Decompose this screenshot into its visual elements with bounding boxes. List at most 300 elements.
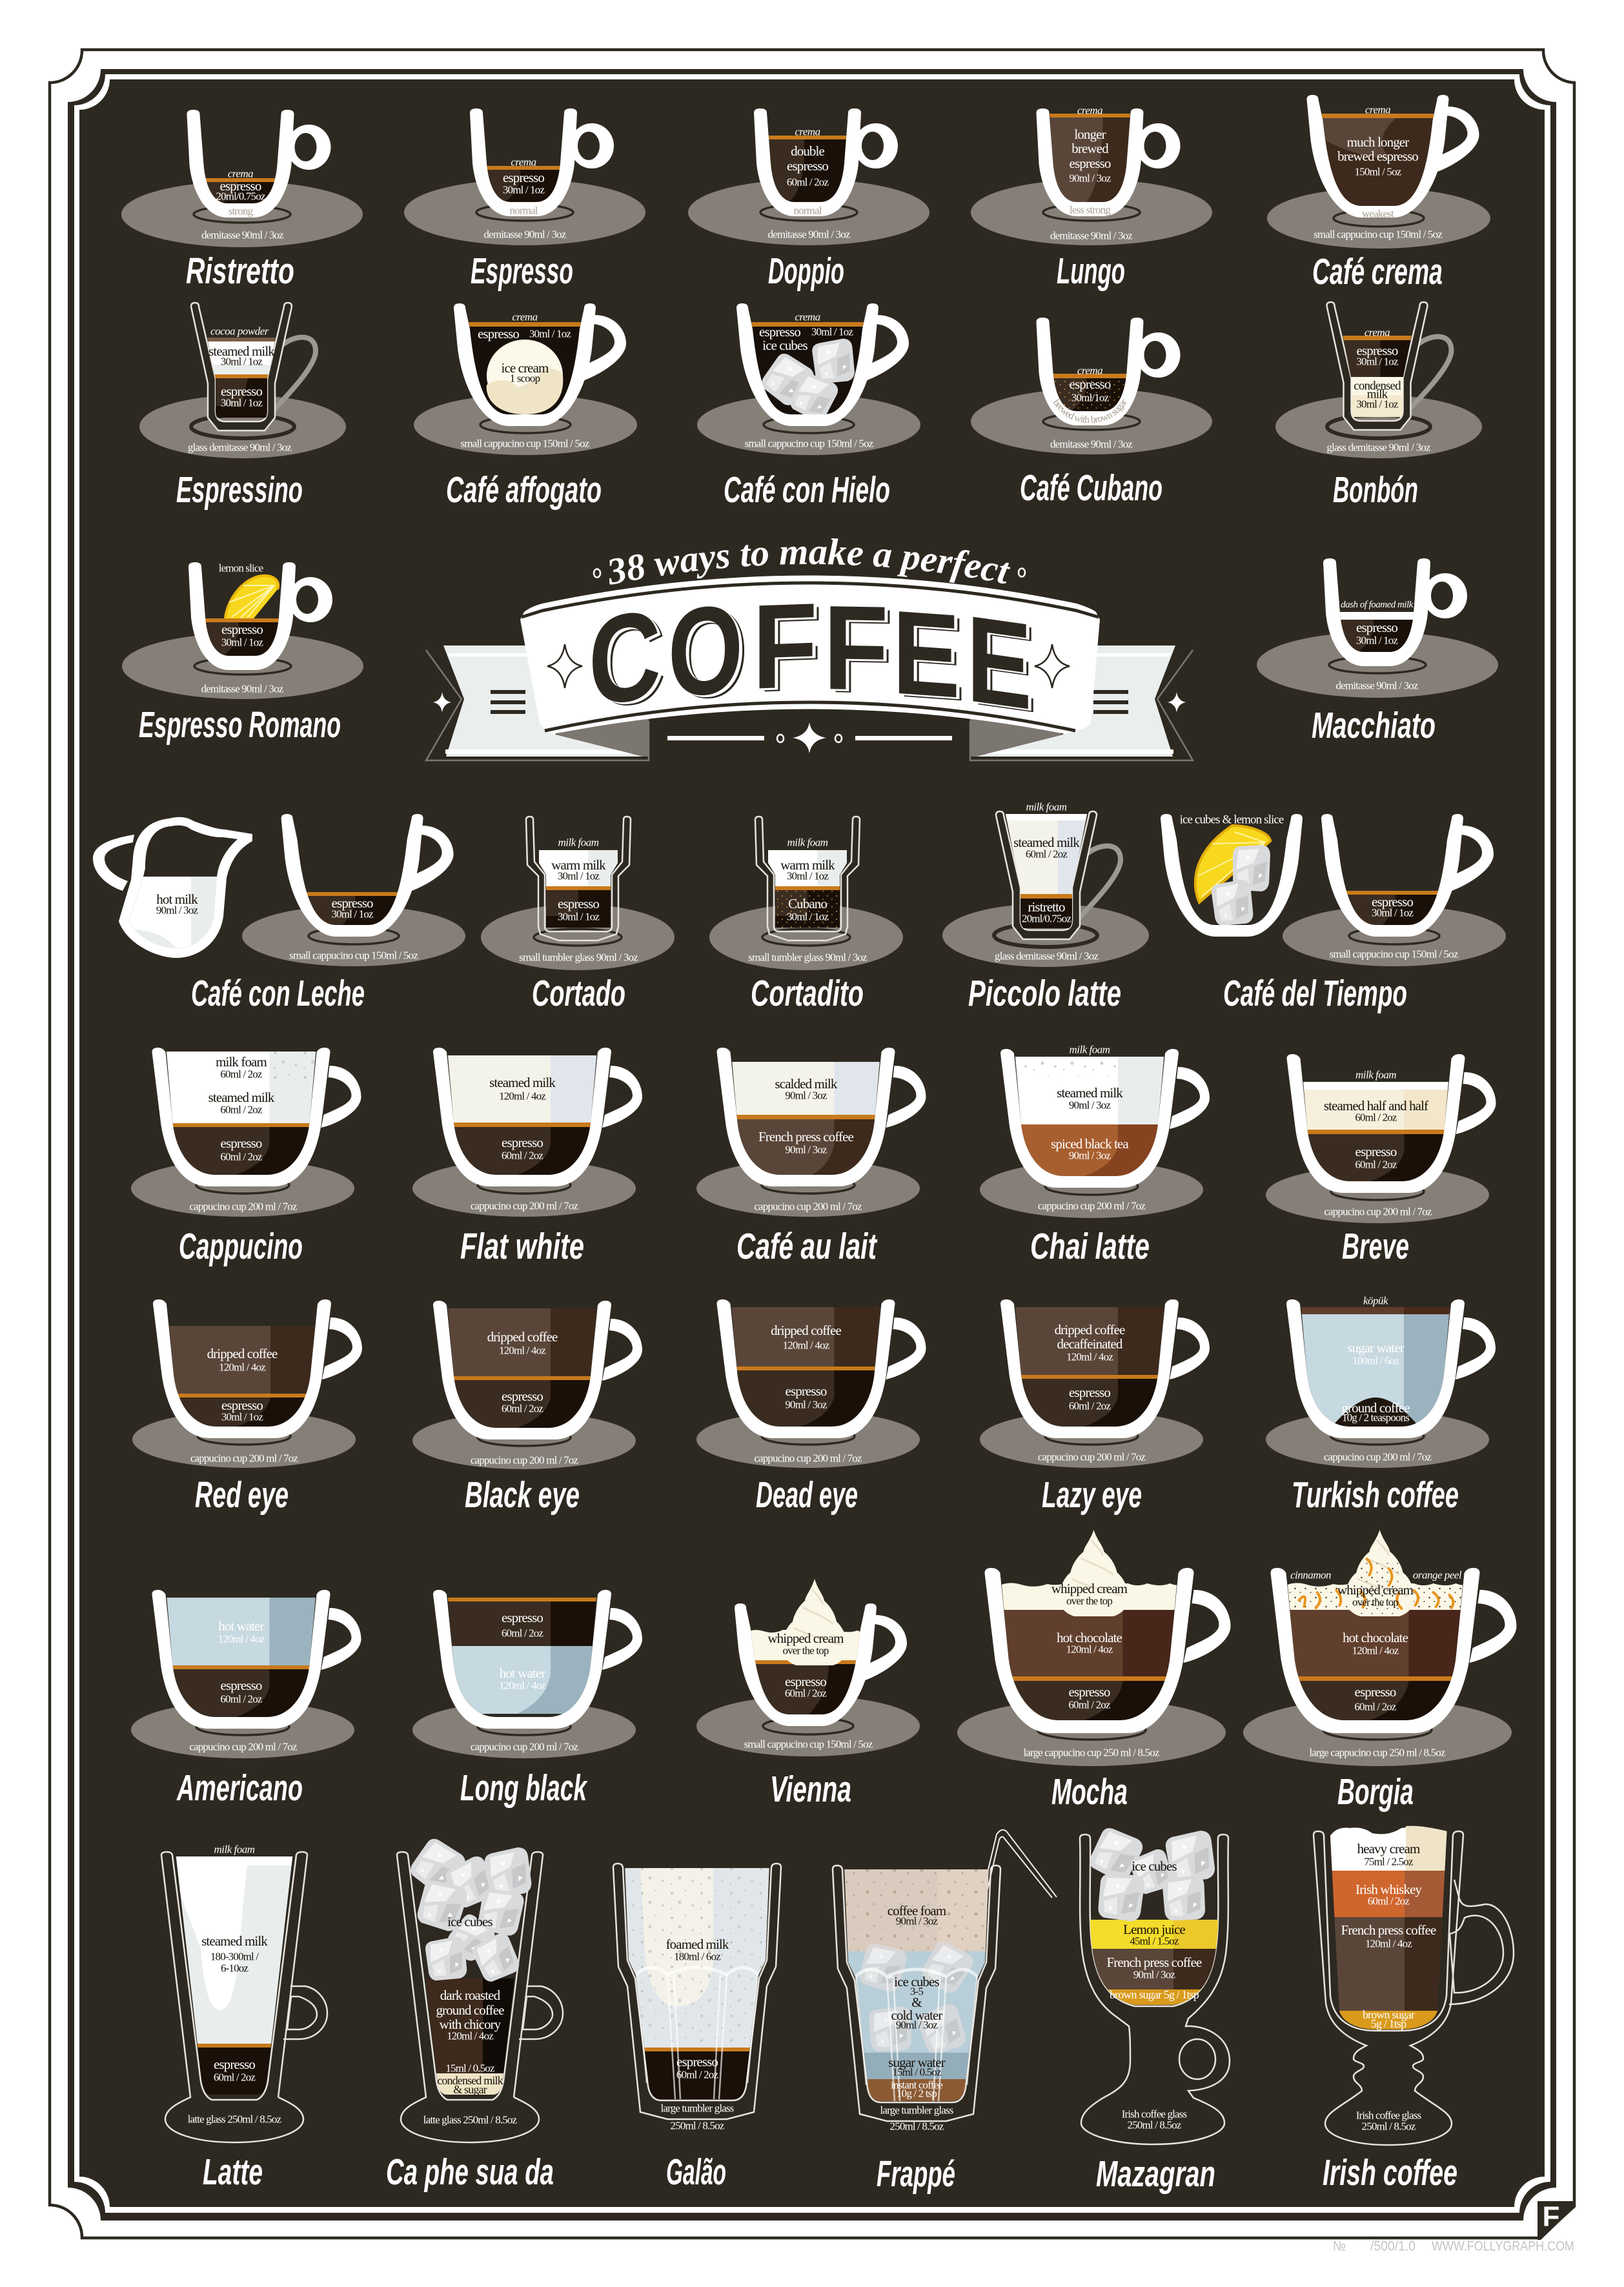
drink: Black eye (361, 1281, 684, 1643)
labels (744, 1631, 873, 1751)
liquid layers (361, 1028, 684, 1390)
glass with layers (519, 817, 638, 963)
saucer (1283, 906, 1506, 966)
name: Americano (176, 1767, 303, 1809)
drink: Café con Leche (93, 795, 514, 1156)
labels: normal (793, 204, 822, 217)
labels: espresso (787, 158, 828, 174)
labels: longer (1074, 127, 1106, 142)
labels: espresso (1069, 1684, 1110, 1700)
labels: 30ml / 1oz (221, 396, 263, 409)
labels: glass demitasse 90ml / 3oz (995, 950, 1099, 962)
cup with layers (81, 543, 403, 904)
labels: espresso (221, 383, 262, 399)
liquid layers (928, 1280, 1251, 1642)
latte glass (397, 1852, 563, 2142)
labels: cappucino cup 200 ml / 7oz (754, 1452, 862, 1464)
labels: with chicory (440, 2017, 502, 2032)
labels: espresso (1372, 894, 1413, 910)
word: COFFEE (589, 578, 1037, 739)
subtitle curve (610, 564, 1010, 585)
labels: 30ml / 1oz (787, 910, 829, 923)
labels: heavy cream (1357, 1841, 1420, 1856)
liquid and ice (646, 284, 969, 645)
glass with layers (995, 800, 1121, 962)
labels: 15ml / 0.5oz (892, 2066, 942, 2079)
saucer (1257, 632, 1498, 698)
labels: cappucino cup 200 ml / 7oz (1038, 1451, 1146, 1463)
labels: espresso (221, 622, 263, 637)
labels: French press coffee (1107, 1955, 1202, 1970)
labels: 30ml / 1oz (221, 355, 263, 368)
labels: glass demitasse 90ml / 3oz (188, 442, 292, 453)
labels: & (911, 1995, 922, 2010)
labels: 20ml/0.75oz (1022, 913, 1071, 924)
cup with layers (1037, 108, 1180, 239)
word: COFFEE: F (829, 584, 893, 719)
labels: ristretto (1028, 899, 1065, 915)
labels: ice cubes (1132, 1858, 1177, 1874)
labels: large tumbler glass (661, 2102, 734, 2115)
cup with layers (363, 284, 686, 645)
drink: Turkish coffee (1214, 1280, 1537, 1642)
icon: ice cubes (407, 1835, 534, 1985)
labels: dripped coffee (487, 1329, 558, 1345)
labels: cappucino cup 200 ml / 7oz (471, 1740, 578, 1753)
saucer (412, 1702, 636, 1758)
labels (471, 1610, 578, 1753)
labels (1050, 105, 1133, 241)
name: Ca phe sua da (386, 2151, 554, 2193)
ice and lemon glass (1070, 795, 1393, 1156)
labels: ice cubes (762, 338, 807, 353)
labels: warm milk (551, 857, 606, 873)
word: COFFEE: O (668, 578, 743, 724)
labels: weakest (1362, 208, 1394, 219)
labels: steamed milk (1013, 835, 1080, 850)
labels: large cappucino cup 250 ml / 8.5oz (1023, 1747, 1160, 1758)
name: Espressino (176, 469, 303, 511)
liquid layers (1214, 1280, 1537, 1642)
word: COFFEE: F (753, 578, 817, 715)
drink: Red eye (81, 1280, 403, 1642)
saucer (242, 906, 465, 966)
labels: crema (1365, 327, 1390, 338)
labels: 120ml / 4oz (1365, 1938, 1412, 1949)
drink: Cappucino (80, 1028, 403, 1390)
labels: 120ml / 4oz (499, 1680, 546, 1691)
cup with layers (1215, 539, 1538, 900)
labels: brown sugar 5g / 1tsp (1110, 1988, 1199, 2001)
labels: 120ml / 4oz (783, 1339, 830, 1352)
labels: French press coffee (758, 1129, 854, 1144)
labels: 30ml/1oz (1071, 391, 1110, 404)
saucer (414, 394, 637, 455)
labels: 120ml / 4oz (219, 1361, 266, 1374)
name: Black eye (465, 1474, 580, 1516)
labels (519, 837, 638, 963)
small cappucino cup (1306, 95, 1479, 218)
word: COFFEE: E (895, 588, 964, 725)
name: Chai latte (1030, 1226, 1150, 1267)
labels: steamed milk (208, 1090, 275, 1105)
demitasse cup (1037, 108, 1180, 216)
labels: espresso (785, 1674, 826, 1689)
labels: 120ml / 4oz (447, 2029, 494, 2042)
labels (754, 1076, 862, 1212)
labels: small cappucino cup 150ml / 5oz (289, 949, 418, 962)
drink: Galão (613, 1864, 781, 2193)
labels: sugar water (888, 2055, 946, 2070)
labels (1023, 1581, 1160, 1758)
drink: Chai latte (928, 1030, 1251, 1391)
name: Irish coffee (1323, 2152, 1457, 2193)
saucer (980, 1411, 1203, 1468)
labels: whipped cream (1051, 1581, 1128, 1596)
labels: 60ml / 2oz (785, 1687, 827, 1699)
labels: 90ml / 3oz (1069, 1149, 1111, 1162)
labels: 90ml / 3oz (785, 1398, 827, 1411)
labels: normal (509, 204, 538, 217)
labels: much longer (1347, 134, 1409, 150)
labels: 120ml / 4oz (1352, 1645, 1399, 1656)
labels: coffee foam (888, 1903, 946, 1918)
logo flag: F (1543, 2201, 1559, 2232)
labels: demitasse 90ml / 3oz (483, 229, 567, 240)
footer credit: /500/1.0 (1370, 2239, 1416, 2254)
saucer (971, 179, 1212, 245)
labels: less strong (1070, 204, 1111, 216)
Irish coffee glass (1080, 1835, 1230, 2144)
drink: Café del Tiempo (1070, 795, 1554, 1156)
labels: espresso (221, 1135, 262, 1151)
saucer (696, 1411, 920, 1468)
name: Espresso Romano (139, 704, 341, 746)
whipped cream swirl (1060, 1530, 1128, 1616)
labels (1330, 894, 1459, 961)
labels: French press coffee (1341, 1922, 1436, 1938)
labels (289, 895, 418, 962)
liquid layers (620, 1868, 775, 2100)
name: Lazy eye (1042, 1474, 1142, 1516)
labels: sugar water (1347, 1340, 1405, 1356)
drink: Flat white (361, 1028, 684, 1390)
labels (471, 1075, 578, 1212)
labels: steamed milk (489, 1075, 556, 1090)
lemon and ice (1070, 795, 1393, 1156)
labels (995, 800, 1099, 962)
labels: latte glass 250ml / 8.5oz (188, 2113, 282, 2125)
demitasse cup (1037, 318, 1180, 425)
cup with layers (361, 1028, 684, 1390)
word: COFFEE: C (592, 585, 664, 735)
labels: 90ml / 3oz (896, 1915, 938, 1927)
labels: double (791, 143, 824, 159)
labels: foamed milk (666, 1936, 729, 1952)
drink: Vienna (644, 1579, 967, 1946)
labels: 60ml / 2oz (1368, 1895, 1410, 1907)
liquid layers (769, 136, 846, 202)
labels (189, 1618, 298, 1753)
right ribbon (970, 645, 1193, 760)
labels: brewed (1071, 141, 1109, 156)
name: Café Cubano (1020, 467, 1162, 509)
labels: brewed espresso (1337, 148, 1418, 164)
labels: hot chocolate (1057, 1630, 1122, 1645)
labels (483, 156, 567, 240)
labels: espresso (759, 324, 800, 340)
labels: crema (1077, 364, 1102, 377)
glass with layers (613, 1864, 781, 2131)
labels: 250ml / 8.5oz (671, 2120, 725, 2131)
word: COFFEE: C (594, 587, 666, 737)
labels: 30ml / 1oz (1356, 355, 1399, 368)
labels: lemon slice (219, 562, 263, 574)
drink: Café con Hielo (646, 284, 969, 645)
liquid layers (1326, 336, 1429, 417)
logo flag (1538, 2201, 1576, 2240)
labels: 20ml/0.75oz (216, 190, 266, 203)
labels: small tumbler glass 90ml / 3oz (519, 951, 638, 963)
labels: crema (512, 311, 538, 323)
labels: ground coffee (1341, 1400, 1410, 1416)
label: ice cubes & lemon slice (1180, 813, 1284, 826)
drink: Macchiato (1215, 539, 1538, 900)
labels: hot water (218, 1618, 265, 1634)
liquid layers (1324, 1826, 1453, 2030)
labels: espresso (221, 1678, 262, 1693)
name: Vienna (770, 1769, 851, 1810)
labels: espresso (332, 895, 373, 911)
labels (1314, 103, 1443, 240)
cup with layers (646, 284, 969, 645)
labels: small tumbler glass 90ml / 3oz (748, 951, 868, 963)
labels: 30ml / 1oz (1356, 634, 1398, 647)
labels: espresso (786, 1383, 827, 1399)
saucer (1275, 395, 1482, 458)
labels: crema (1077, 105, 1102, 116)
labels: espresso (214, 2057, 255, 2072)
labels: cappucino cup 200 ml / 7oz (1324, 1206, 1432, 1217)
labels: decaffeinated (1057, 1336, 1123, 1352)
bottom ornament (667, 722, 952, 753)
cappucino cup (152, 1048, 361, 1186)
footer credit (1333, 2239, 1574, 2254)
liquid layers (363, 284, 686, 645)
labels: small cappucino cup 150ml / 5oz (744, 1738, 873, 1751)
labels: köpük (1363, 1295, 1388, 1306)
demitasse cup (187, 110, 330, 218)
labels: dark roasted (440, 1987, 501, 2003)
small cappucino cup (1321, 814, 1494, 937)
labels: condensed (1354, 380, 1401, 392)
labels: small cappucino cup 150ml / 5oz (1330, 948, 1459, 961)
labels: 90ml / 3oz (1069, 1099, 1111, 1112)
drink: Cortadito (709, 817, 903, 1014)
small tumbler glass (755, 817, 860, 940)
labels: 90ml / 3oz (1069, 172, 1111, 185)
saucer (709, 904, 903, 970)
glass with layers (1314, 1826, 1514, 2145)
labels: scalded milk (775, 1076, 838, 1092)
icon: milk pitcher: hot milk (156, 891, 198, 907)
drink: Americano (80, 1570, 403, 1932)
liquid layers (191, 795, 514, 1156)
labels: 60ml / 2oz (676, 2068, 718, 2081)
drink: Espresso Romano (81, 543, 403, 904)
labels (748, 837, 868, 963)
labels: small cappucino cup 150ml / 5oz (745, 438, 874, 449)
drink: Cortado (481, 817, 675, 1014)
cup with layers (644, 1280, 967, 1642)
name: Red eye (195, 1474, 289, 1516)
labels (661, 1936, 734, 2131)
labels: cappucino cup 200 ml / 7oz (471, 1199, 578, 1212)
name: Bonbón (1333, 469, 1418, 511)
curve for wall label (1046, 390, 1133, 423)
labels: espresso (676, 2054, 718, 2069)
labels: demitasse 90ml / 3oz (201, 229, 284, 241)
left ribbon (426, 645, 649, 760)
name: Café con Hielo (724, 469, 890, 511)
glass with layers (188, 303, 316, 453)
labels: 60ml / 2oz (1354, 1700, 1397, 1713)
saucer (1266, 1411, 1489, 1468)
saucer (971, 389, 1212, 454)
word: COFFEE: F (827, 583, 891, 718)
labels: 30ml / 1oz (1356, 398, 1399, 411)
liquid and ice (839, 1869, 994, 2101)
labels: Lemon juice (1123, 1922, 1185, 1937)
cappucino cup (433, 1590, 642, 1729)
cup with layers (1213, 1530, 1536, 1910)
labels: cappucino cup 200 ml / 7oz (190, 1452, 298, 1464)
liquid layers (1077, 1920, 1232, 2006)
demitasse cup (1323, 558, 1467, 666)
cappucino cup (1286, 1299, 1496, 1438)
glass with layers (1077, 1824, 1232, 2144)
saucer (412, 1412, 636, 1469)
labels: milk (1367, 387, 1388, 401)
labels: espresso (1357, 343, 1398, 358)
whipped cream swirl (782, 1579, 847, 1665)
labels: 120ml / 4oz (218, 1633, 265, 1645)
labels: latte glass 250ml / 8.5oz (423, 2113, 518, 2126)
liquid layers (1050, 114, 1130, 202)
small cappucino cup (281, 814, 454, 937)
name: Latte (203, 2151, 263, 2193)
word: COFFEE: C (589, 584, 661, 733)
labels (201, 562, 284, 695)
drink: Latte (161, 1844, 327, 2193)
labels: 90ml / 3oz (896, 2019, 938, 2031)
saucer (957, 1699, 1226, 1766)
name: Café au lait (736, 1226, 877, 1267)
labels (1326, 327, 1431, 453)
drink: Ristretto (121, 110, 363, 284)
labels: 6-10oz (221, 1962, 249, 1974)
liquid layers (1213, 1549, 1536, 1910)
drink: Mazagran (1077, 1824, 1232, 2195)
labels: crema (511, 156, 536, 168)
orange peel (1299, 1591, 1453, 1608)
icon: milk pitcher (93, 813, 252, 958)
drink: Espresso (404, 108, 645, 291)
labels (745, 311, 874, 449)
cup with layers (81, 1280, 403, 1642)
name: Cortado (532, 973, 625, 1014)
demitasse cup (754, 108, 898, 216)
glass with layers (833, 1865, 1000, 2133)
labels: steamed half and half (1324, 1098, 1428, 1113)
liquid layers (1231, 795, 1554, 1156)
labels: espresso (1355, 1144, 1397, 1159)
glass facets (636, 1967, 758, 2099)
labels: 250ml / 8.5oz (1362, 2120, 1416, 2133)
labels: 60ml / 2oz (1355, 1158, 1397, 1171)
name: Café affogato (446, 469, 602, 511)
name: Frappé (877, 2153, 955, 2195)
saucer (1243, 1699, 1512, 1766)
labels: crema (795, 125, 820, 138)
name: Espresso (471, 250, 573, 292)
cup with layers (191, 795, 514, 1156)
labels: 90ml / 3oz (1133, 1969, 1175, 1980)
word: COFFEE: F (824, 581, 888, 716)
name: Doppio (768, 250, 844, 292)
cup with layers (80, 1570, 403, 1932)
liquid layers (80, 1570, 403, 1932)
labels (754, 1323, 862, 1464)
small cappucino cup (454, 303, 626, 426)
saucer (1267, 188, 1490, 249)
labels: 10g / 2 tsp (897, 2088, 937, 2099)
drink: Doppio (688, 108, 929, 291)
liquid layers (995, 814, 1098, 928)
labels: steamed milk (1057, 1085, 1123, 1101)
name: Mazagran (1096, 2153, 1215, 2195)
labels: 60ml / 2oz (502, 1402, 543, 1415)
drink: Frappé (833, 1830, 1057, 2195)
labels: 30ml / 1oz (331, 908, 374, 920)
labels: espresso (502, 1135, 543, 1150)
word: COFFEE: O (673, 581, 748, 727)
labels: espresso (1069, 1385, 1110, 1400)
labels: 60ml / 2oz (214, 2071, 256, 2084)
cappucino cup (152, 1590, 361, 1729)
labels: dash of foamed milk (1341, 600, 1414, 610)
demitasse cup (188, 562, 332, 670)
cappucino cup (716, 1048, 926, 1186)
labels: 250ml / 8.5oz (1128, 2119, 1182, 2131)
cup with layers (644, 1028, 967, 1390)
drink: Café au lait (644, 1028, 967, 1390)
labels: 30ml / 1oz (221, 1411, 263, 1423)
saucer (139, 395, 346, 458)
labels: 30ml / 1oz (558, 870, 600, 882)
labels: 90ml / 3oz (785, 1144, 827, 1155)
footer credit: WWW.FOLLYGRAPH.COM (1432, 2239, 1574, 2254)
labels: milk foam (1026, 800, 1067, 813)
labels: cappucino cup 200 ml / 7oz (189, 1201, 298, 1212)
liquid layers (487, 166, 560, 202)
cup with layers (361, 1570, 684, 1932)
word: COFFEE: F (756, 580, 820, 717)
labels: espresso (1355, 1684, 1396, 1700)
labels: 90ml / 3oz (785, 1090, 827, 1101)
subtitle end dots (594, 568, 1025, 577)
cappucino cup (716, 1299, 926, 1438)
